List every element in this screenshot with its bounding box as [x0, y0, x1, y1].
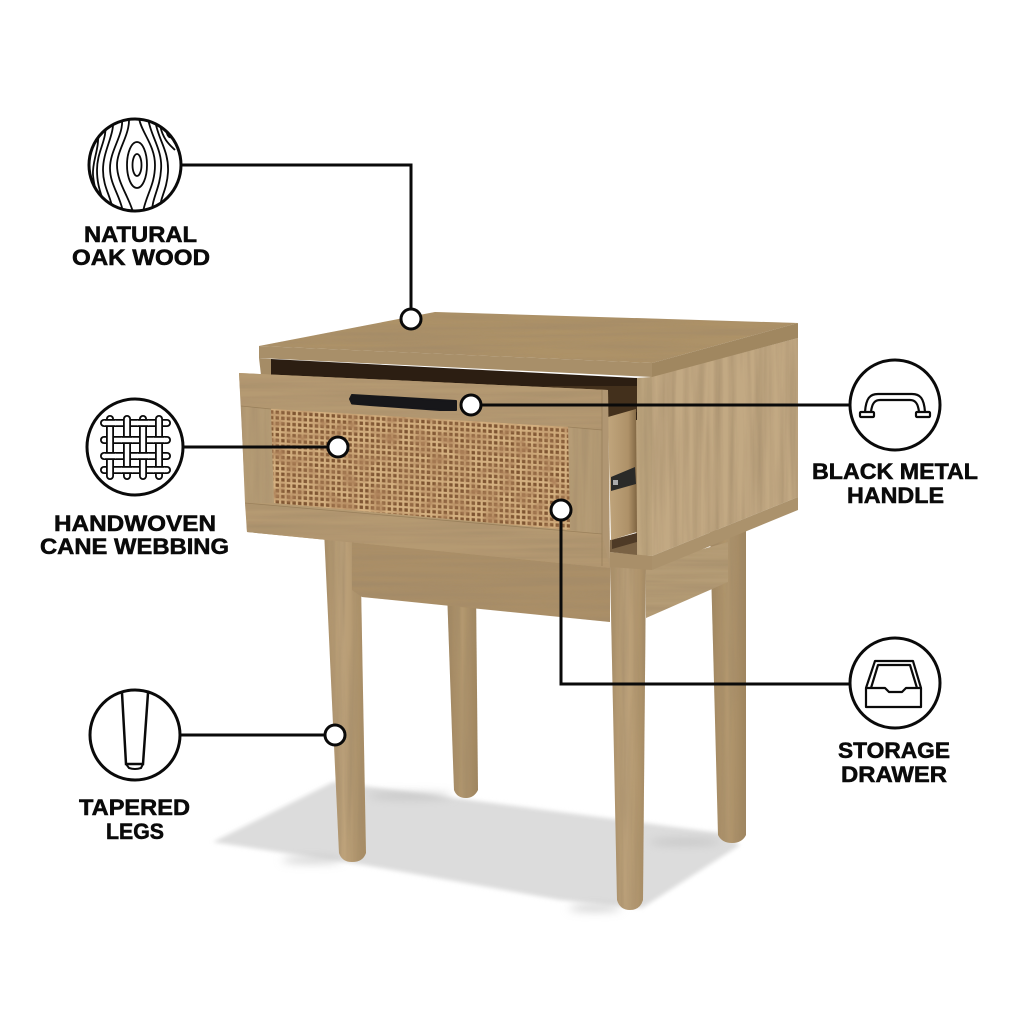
cabinet left strip	[259, 358, 271, 376]
label: black metal handle: BLACK METAL	[812, 459, 978, 484]
leader lines	[180, 165, 850, 735]
drawer bottom rail	[245, 503, 610, 568]
drawer slide	[611, 467, 636, 491]
label: storage drawer	[838, 738, 950, 787]
label: tapered legs	[79, 795, 190, 844]
drawer right edge	[602, 390, 610, 568]
drawer cavity	[271, 359, 637, 420]
callout dot: cane webbing	[328, 437, 348, 457]
drawer left stile	[241, 406, 274, 503]
label: tapered legs: LEGS	[106, 819, 164, 844]
callout dot: handle	[461, 395, 481, 415]
label: natural oak wood: OAK WOOD	[72, 245, 210, 270]
drawer front panel	[239, 373, 610, 568]
label: natural oak wood: NATURAL	[84, 222, 197, 247]
top front edge	[259, 346, 652, 377]
cabinet side panel	[650, 338, 798, 556]
icon: cane weave	[87, 399, 183, 495]
lower cavity	[610, 533, 637, 555]
label: black metal handle	[812, 459, 978, 508]
floor shadow	[213, 782, 740, 911]
callout dot: legs	[325, 725, 345, 745]
frame seams	[241, 390, 602, 566]
drawer top rail	[239, 373, 608, 430]
callout dot: oak wood	[401, 309, 421, 329]
callout dot: drawer	[551, 500, 571, 520]
label: storage drawer: DRAWER	[841, 762, 947, 787]
label: tapered legs: TAPERED	[79, 795, 190, 820]
drawer side	[608, 409, 637, 540]
icon: handle	[850, 360, 940, 450]
black metal handle	[350, 395, 456, 410]
back legs	[447, 530, 746, 843]
cabinet front stile	[636, 377, 652, 556]
label: handwoven cane webbing: HANDWOVEN	[54, 511, 216, 536]
apron rail	[352, 530, 728, 622]
bottom board edges	[610, 497, 798, 570]
label: handwoven cane webbing	[40, 511, 229, 559]
icon: tapered leg	[90, 690, 180, 780]
icon: storage tray	[850, 638, 940, 728]
cane webbing panel	[271, 409, 570, 530]
nightstand illustration	[239, 312, 798, 910]
icon: wood grain	[89, 118, 181, 212]
cabinet top surface	[259, 312, 798, 363]
label: natural oak wood	[72, 222, 210, 270]
top side edge	[652, 323, 798, 377]
drawer right stile	[568, 427, 602, 534]
front left leg	[324, 530, 366, 862]
label: handwoven cane webbing: CANE WEBBING	[40, 534, 229, 559]
front right leg	[610, 565, 646, 910]
label: black metal handle: HANDLE	[847, 483, 944, 508]
label: storage drawer: STORAGE	[838, 738, 950, 763]
